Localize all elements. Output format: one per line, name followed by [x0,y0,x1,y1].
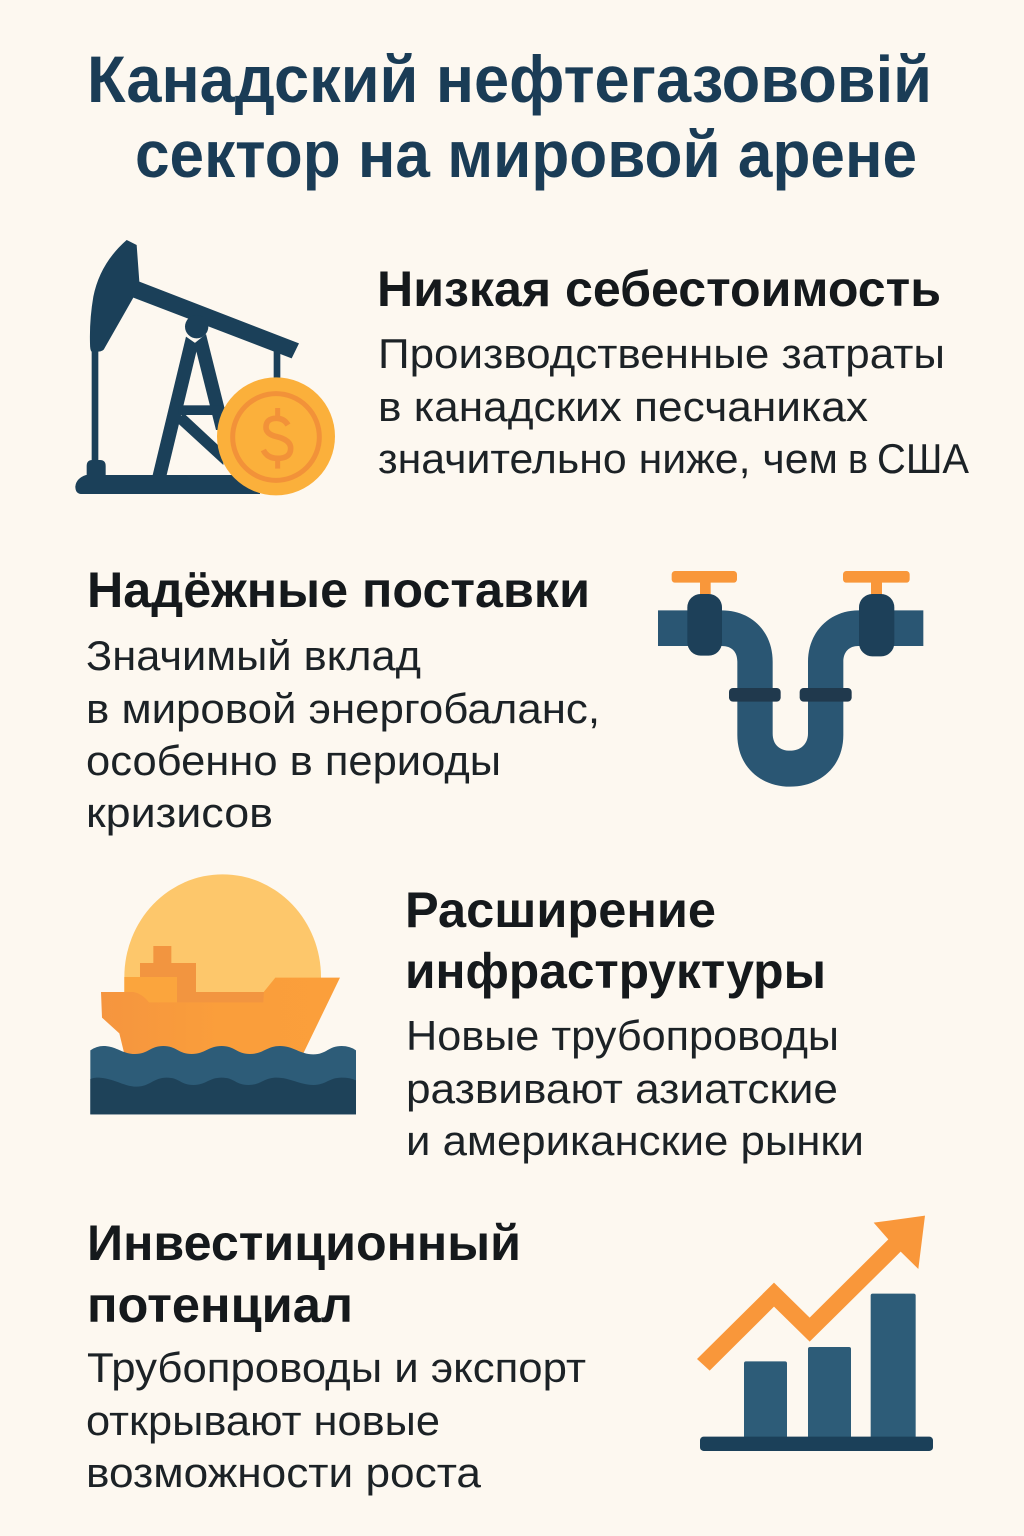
text: infrastructure expansion: развивают азиатские [406,1065,838,1112]
text: low cost: США [877,435,969,482]
text: low cost: в [848,435,868,482]
text: investment potential: открывают новые [86,1397,440,1444]
sun [124,874,321,998]
text: investment potential: возможности роста [86,1449,482,1496]
text: infrastructure expansion: Новые трубопроводы [406,1012,839,1059]
text: low cost: в канадских песчаниках [378,383,868,430]
icon: tanker ship at sunset [90,874,356,1114]
text: infrastructure expansion [406,1012,864,1164]
heading: investment potential: потенциал [87,1277,353,1333]
icon: pipeline with valves [658,571,923,787]
bars [744,1294,916,1440]
arrow [697,1216,925,1371]
valve handles [672,571,910,597]
heading: low cost: Низкая себестоимость [377,261,941,317]
heading: infrastructure expansion: инфраструктуры [405,943,826,999]
text: reliable supply [86,632,600,836]
lower waves [90,1078,356,1114]
heading: infrastructure expansion: Расширение [405,882,716,938]
text: reliable supply: в мировой энергобаланс, [86,685,600,732]
heading: reliable supply: Надёжные поставки [87,562,590,618]
heading: infrastructure expansion [405,882,826,999]
icon: dollar coin [217,377,335,495]
heading: investment potential [87,1215,521,1333]
text: low cost: Производственные затраты [378,330,945,377]
title [87,42,932,191]
text: reliable supply: особенно в периоды [86,737,501,784]
ship superstructure [140,946,264,1005]
text: reliable supply: кризисов [86,789,273,836]
title: сектор на мировой арене [135,117,917,191]
text: infrastructure expansion: и американские рынки [406,1117,864,1164]
pump rod [274,351,280,381]
title: Канадский нефтегазововій [87,42,932,116]
heading: investment potential: Инвестиционный [87,1215,521,1271]
text: low cost: значительно ниже, чем [378,435,838,482]
text: low cost [378,330,969,482]
text: reliable supply: Значимый вклад [86,632,421,679]
valve bodies [687,594,894,656]
waves [90,1046,356,1114]
baseline [700,1437,933,1451]
text: investment potential: Трубопроводы и экспорт [87,1344,586,1391]
pipe clamps [729,688,852,702]
icon: oil pump with coin [75,240,335,495]
text: investment potential [86,1344,586,1496]
icon: growth bar chart with arrow [697,1216,933,1451]
ship hull [101,978,340,1057]
